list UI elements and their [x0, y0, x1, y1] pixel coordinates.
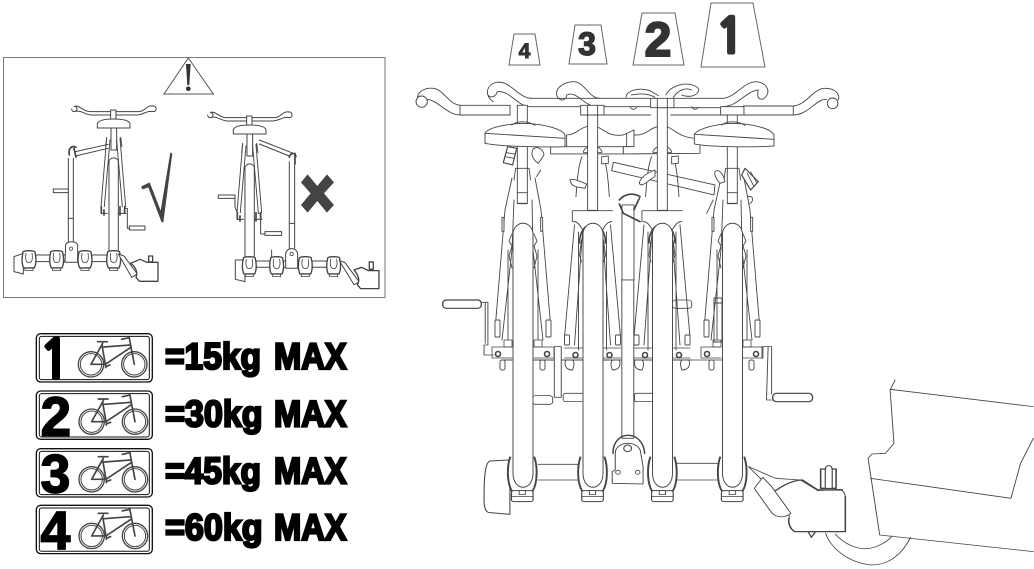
legend row 3: =45kg: [165, 450, 261, 491]
tag 1: 1: [715, 14, 745, 61]
left crank: [443, 300, 494, 355]
centre post and bracket: [612, 278, 645, 484]
diagram: incorrect loading: [208, 112, 379, 289]
legend row 1: =15kg: [165, 336, 261, 377]
front wheels of the four bikes: [513, 223, 742, 487]
post and arm: [53, 144, 108, 247]
crank handles: [218, 195, 282, 235]
gear and brake details: [503, 147, 758, 213]
bike 2 upper frame: [642, 108, 682, 230]
centre post top: [619, 194, 640, 280]
base rail: [14, 242, 121, 274]
panel: correct and incorrect loading: [4, 58, 385, 298]
levers and clamp details: [570, 156, 678, 188]
handlebars: [416, 82, 839, 124]
panel: weight limits legend: [36, 333, 347, 561]
legend row 1: [36, 333, 347, 386]
diagram: rack base, vehicle and handles: [443, 278, 1033, 565]
right crank: [762, 347, 813, 402]
position tags 1 to 4: [509, 3, 765, 67]
crossbars: [538, 463, 718, 480]
post and arm: [259, 140, 296, 248]
bike 1 upper frame: [712, 145, 753, 231]
tag 3: [569, 25, 607, 64]
hitch: [118, 254, 158, 281]
hitch mount: [748, 465, 845, 537]
rear handles and crossbar: [532, 300, 723, 404]
legend row 3: [36, 446, 347, 505]
legend row 2: [36, 387, 347, 448]
icon: warning triangle: [164, 58, 213, 94]
icon: cross mark: [301, 174, 334, 213]
base rail: [235, 248, 341, 282]
rear saddles: [551, 126, 700, 154]
front saddles: [485, 122, 774, 147]
end cap: [484, 460, 510, 514]
tag 2: [633, 13, 684, 67]
legend row 1: MAX: [274, 336, 347, 377]
hitch: [339, 261, 379, 289]
legend row 4: [36, 502, 347, 561]
tag 3: 3: [578, 26, 596, 62]
forks of the four bikes: [492, 178, 763, 370]
diagonal arm: [612, 162, 715, 195]
vehicle rear: [826, 380, 1033, 565]
legend row 2: =30kg: [165, 394, 263, 435]
tag 4: [509, 34, 540, 65]
legend row 4: =60kg: [165, 507, 263, 548]
legend row 3: MAX: [274, 450, 347, 491]
bike 4 upper frame: [502, 145, 543, 231]
legend row 2: 2: [41, 387, 71, 448]
legend row 1: 1: [39, 333, 71, 386]
wheel clamps: [508, 457, 747, 502]
tag 1: [701, 3, 765, 67]
diagram: correct loading: [14, 106, 158, 281]
diagram: bike tops, handlebars and saddles: [416, 82, 839, 280]
legend row 4: MAX: [274, 507, 347, 548]
tag 4: 4: [519, 40, 531, 63]
legend row 4: 4: [41, 502, 71, 561]
bike 3 upper frame: [572, 108, 613, 230]
tag 2: 2: [645, 14, 671, 67]
legend row 2: MAX: [274, 394, 347, 435]
crank handle: [125, 208, 145, 230]
legend row 3: 3: [41, 446, 70, 505]
icon: check mark: [141, 153, 172, 223]
